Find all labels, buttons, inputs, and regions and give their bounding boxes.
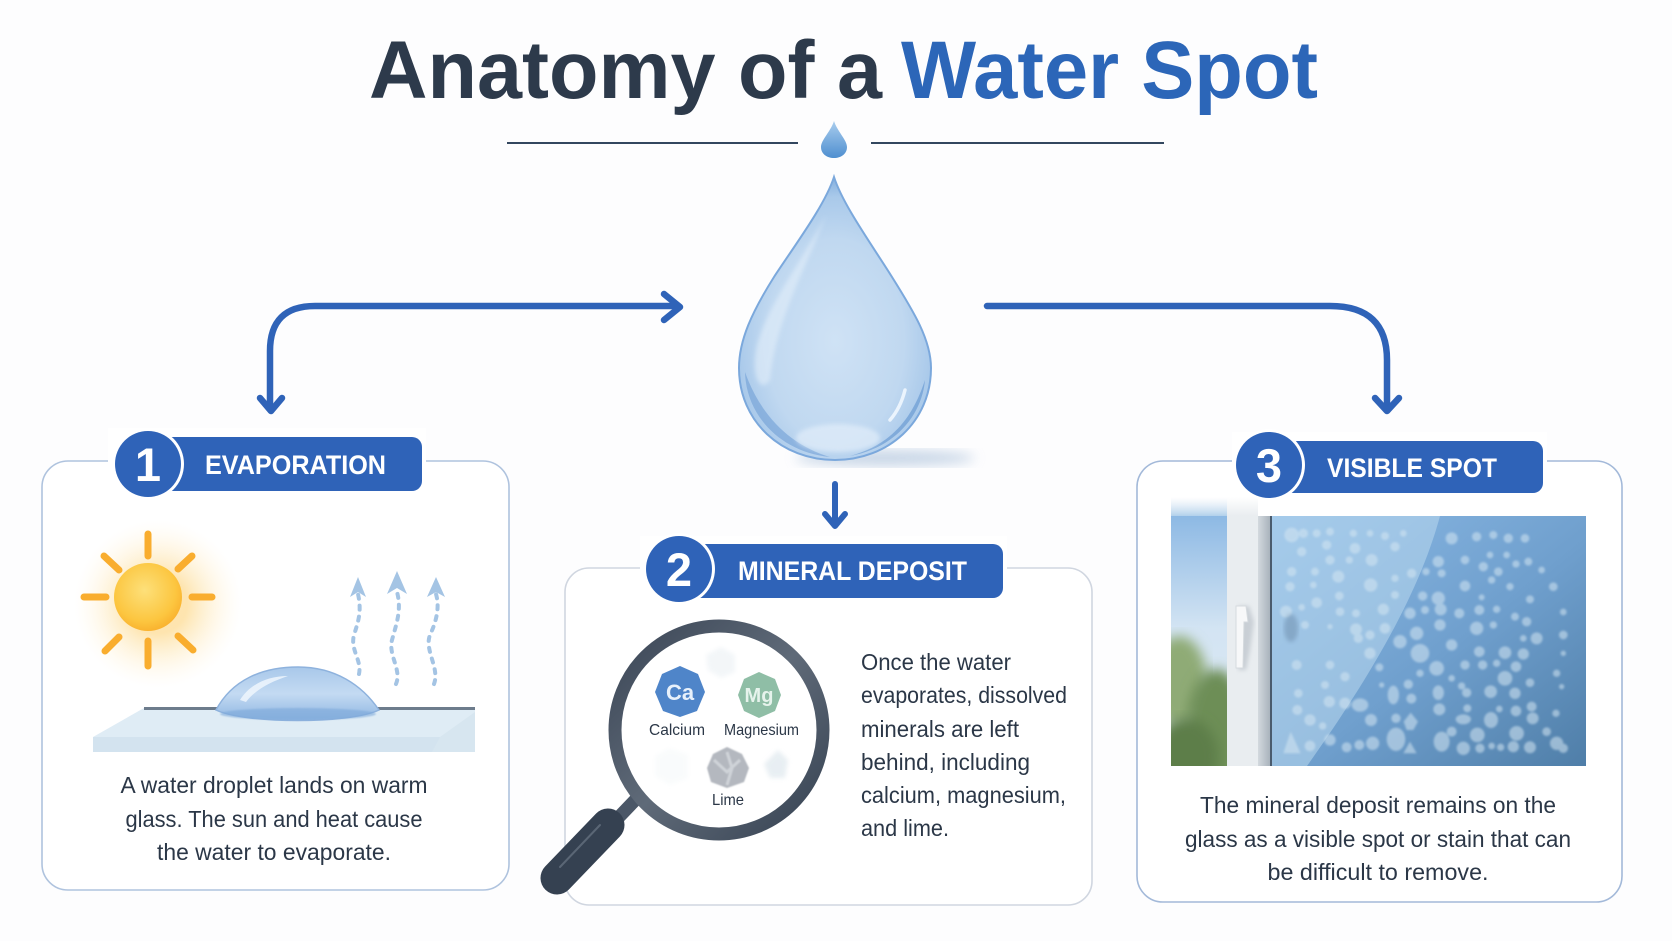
magnifier handle — [557, 795, 640, 878]
calcium label: Calcium — [649, 722, 705, 739]
panel 1 header badge: EVAPORATION — [205, 450, 386, 480]
dark smudge on glass — [1284, 614, 1298, 642]
panel: evaporation — [42, 428, 509, 890]
outdoor view — [1151, 497, 1246, 794]
glass pane — [1272, 516, 1586, 766]
title divider with droplet — [507, 121, 1164, 158]
panel 1 header badge — [108, 428, 426, 500]
window frame — [1227, 497, 1258, 516]
arrow: drop to evaporation, two-headed — [260, 294, 680, 411]
lime rock — [707, 747, 749, 788]
panel 3 description — [1185, 792, 1571, 885]
magnesium hexagon — [738, 672, 781, 718]
panel 3 header badge — [1232, 429, 1547, 501]
window handle — [1236, 606, 1254, 670]
panel 1 description — [120, 772, 428, 865]
panel 2 frame — [565, 568, 1092, 905]
panel 2 description: calcium, magnesium, — [861, 782, 1066, 808]
lime label: Lime — [712, 792, 744, 809]
panel 3 description: be difficult to remove. — [1268, 859, 1488, 885]
title — [369, 25, 1318, 116]
magnesium label: Magnesium — [724, 722, 799, 739]
mineral spots — [1280, 528, 1568, 755]
panel 1 description: glass. The sun and heat cause — [126, 806, 422, 832]
magnifier lens and ring — [615, 626, 823, 834]
panel 3 description: glass as a visible spot or stain that can — [1185, 826, 1571, 852]
calcium hexagon — [655, 666, 705, 717]
panel 2 header badge: 2 — [666, 543, 692, 596]
panel 2 description: and lime. — [861, 815, 949, 841]
title: Anatomy of a — [369, 25, 883, 116]
panel 2 header badge: MINERAL DEPOSIT — [738, 556, 967, 586]
calcium hexagon: Ca — [666, 680, 695, 705]
panel 3 header badge: 3 — [1256, 439, 1282, 492]
panel: visible spot — [1137, 429, 1622, 902]
panel 2 description: minerals are left — [861, 716, 1019, 742]
arrow: drop to visible spot — [987, 306, 1399, 411]
panel 1 header badge: 1 — [135, 438, 161, 491]
panel 3 window illustration — [1151, 497, 1586, 794]
illustration: droplet on glass — [216, 667, 379, 720]
panel 2 header badge — [640, 533, 1007, 605]
panel 1 description: A water droplet lands on warm — [120, 772, 428, 798]
icon: rising vapor arrows — [350, 571, 445, 684]
panel: mineral deposit — [557, 533, 1092, 905]
panel 3 frame — [1137, 461, 1622, 902]
panel 1 description: the water to evaporate. — [157, 839, 391, 865]
panel 2 description — [861, 649, 1067, 841]
illustration: glass slab — [93, 707, 475, 752]
magnesium hexagon: Mg — [745, 685, 773, 707]
vapor arrowheads — [350, 571, 445, 597]
faint mineral specks — [655, 647, 788, 785]
icon: sun — [74, 520, 242, 688]
panel 3 description: The mineral deposit remains on the — [1200, 792, 1556, 818]
panel 2 description: behind, including — [861, 749, 1030, 775]
panel 1 frame — [42, 461, 509, 890]
panel 2 description: Once the water — [861, 649, 1011, 675]
central water drop — [739, 177, 975, 466]
panel 2 description: evaporates, dissolved — [861, 682, 1067, 708]
icon: magnifying glass — [557, 626, 823, 878]
arrow: drop to mineral deposit — [825, 484, 845, 526]
panel 3 header badge: VISIBLE SPOT — [1327, 453, 1497, 483]
title: Water Spot — [901, 25, 1318, 116]
